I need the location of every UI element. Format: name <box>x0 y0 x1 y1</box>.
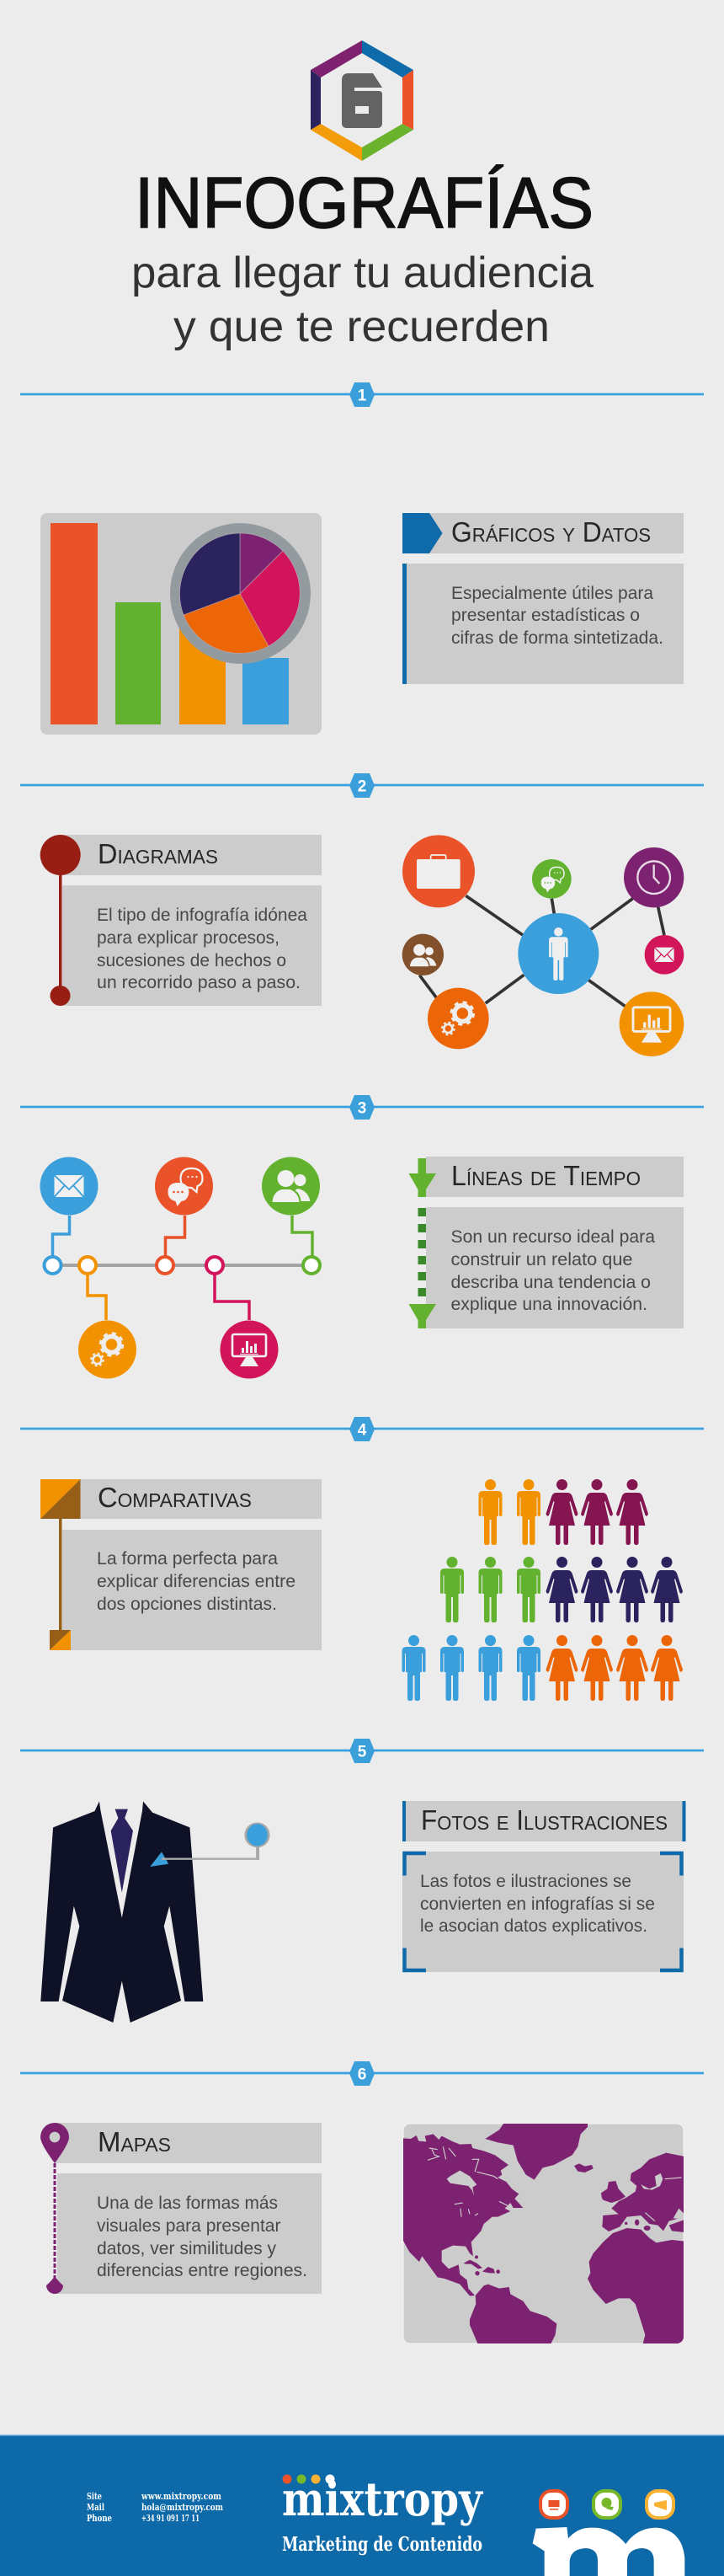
icon: chat bubbles <box>155 1157 213 1215</box>
text block: convierten en infografías si se <box>420 1895 655 1914</box>
network diagram <box>402 835 684 1056</box>
heading bar: Líneas de Tiempo <box>451 1160 641 1191</box>
contact details: Phone <box>87 2513 112 2524</box>
heading bar <box>40 1479 322 1519</box>
text block: explique una innovación. <box>451 1295 647 1314</box>
text block <box>51 875 322 1006</box>
text block: El tipo de infografía idónea <box>97 906 307 925</box>
contact details: +34 91 091 17 11 <box>141 2513 200 2524</box>
heading bar: Mapas <box>98 2126 171 2157</box>
icon: gears <box>428 988 489 1049</box>
text block: describa una tendencia o <box>451 1273 651 1292</box>
heading bar <box>40 835 322 875</box>
divider 2: 2 <box>358 778 366 795</box>
heading bar <box>409 1157 684 1197</box>
text block: para explicar procesos, <box>97 928 279 948</box>
heading bar: Fotos e Ilustraciones <box>421 1804 668 1836</box>
icon: people <box>262 1157 320 1215</box>
heading bar: Gráficos y Datos <box>451 516 651 548</box>
suit illustration with callout <box>40 1801 269 2023</box>
header logo: hexagon with number 6 <box>311 40 413 161</box>
text block <box>402 1852 684 1972</box>
divider 2 <box>20 773 704 798</box>
panel: comparativas <box>40 1479 322 1650</box>
brand logo <box>282 2472 484 2556</box>
icon: chat bubbles <box>532 859 572 899</box>
callout <box>161 1823 269 1860</box>
icon: clock <box>624 847 684 907</box>
divider 5: 5 <box>358 1744 367 1761</box>
icon: monitor <box>620 991 684 1056</box>
pie chart <box>170 523 311 664</box>
text block: Son un recurso ideal para <box>451 1227 655 1247</box>
contact details: hola@mixtropy.com <box>141 2502 223 2513</box>
text block: cifras de forma sintetizada. <box>451 628 663 648</box>
divider 4: 4 <box>358 1422 367 1439</box>
icon: person <box>518 913 599 994</box>
text block: Especialmente útiles para <box>451 584 653 603</box>
text block <box>46 2163 322 2294</box>
row 3 <box>402 1635 683 1701</box>
divider 4 <box>20 1417 704 1441</box>
divider 1: 1 <box>358 387 367 404</box>
heading bar: Diagramas <box>98 838 218 869</box>
icon: monitor <box>221 1321 278 1378</box>
brand logo: Marketing de Contenido <box>282 2533 482 2556</box>
text block: construir un relato que <box>451 1250 633 1269</box>
text block: datos, ver similitudes y <box>97 2239 276 2258</box>
panel: fotos e ilustraciones <box>402 1801 685 1972</box>
footer band <box>0 2434 724 2576</box>
panel: mapas <box>40 2123 322 2294</box>
panel: líneas de tiempo <box>409 1157 684 1328</box>
divider 6: 6 <box>358 2066 366 2084</box>
contact details: Site <box>87 2491 102 2502</box>
text block: presentar estadísticas o <box>451 606 640 625</box>
icon: megaphone <box>647 2491 673 2518</box>
icon: mail <box>40 1157 98 1215</box>
divider 5 <box>20 1739 704 1763</box>
icon: mail <box>645 935 684 975</box>
contact details: www.mixtropy.com <box>141 2491 221 2502</box>
brand logo: mixtropy <box>282 2472 484 2526</box>
subtitle <box>131 249 594 351</box>
heading bar <box>40 2123 322 2163</box>
text block <box>50 1519 322 1650</box>
world map <box>402 2124 684 2346</box>
text block: un recorrido paso a paso. <box>97 973 301 992</box>
divider 3: 3 <box>358 1100 366 1117</box>
text block: visuales para presentar <box>97 2216 281 2236</box>
title: INFOGRAFÍAS <box>135 163 594 243</box>
icon: speech bubble <box>594 2491 620 2518</box>
text block: explicar diferencias entre <box>97 1572 295 1591</box>
icon: briefcase <box>402 835 475 907</box>
panel: bar and pie chart illustration <box>40 513 322 735</box>
text block: sucesiones de hechos o <box>97 951 286 970</box>
divider 3 <box>20 1095 704 1120</box>
icon: gears <box>78 1321 136 1378</box>
icon: people <box>402 934 444 975</box>
row 1 <box>478 1479 648 1545</box>
pictogram chart: men and women <box>402 1479 683 1701</box>
text block: le asocian datos explicativos. <box>420 1916 647 1936</box>
heading bar <box>402 513 684 553</box>
subtitle: para llegar tu audiencia <box>131 249 594 297</box>
text block: dos opciones distintas. <box>97 1595 277 1614</box>
subtitle: y que te recuerden <box>173 302 550 351</box>
row 2 <box>440 1557 683 1622</box>
contact details: Mail <box>87 2502 104 2513</box>
icon: keyboard <box>540 2491 567 2518</box>
text block <box>402 564 684 684</box>
divider 1 <box>20 382 704 407</box>
panel: gráficos y datos <box>402 513 684 684</box>
text block: diferencias entre regiones. <box>97 2261 307 2280</box>
heading bar: Comparativas <box>98 1482 252 1513</box>
timeline illustration <box>40 1157 320 1378</box>
panel: diagramas <box>40 835 322 1006</box>
text block: Una de las formas más <box>97 2194 278 2213</box>
logo mark: m <box>533 2527 684 2576</box>
text block: Las fotos e ilustraciones se <box>420 1872 631 1891</box>
bar chart <box>51 523 289 724</box>
divider 6 <box>20 2061 704 2086</box>
text block <box>409 1207 684 1328</box>
text block: La forma perfecta para <box>97 1549 278 1569</box>
contact details <box>87 2491 223 2524</box>
